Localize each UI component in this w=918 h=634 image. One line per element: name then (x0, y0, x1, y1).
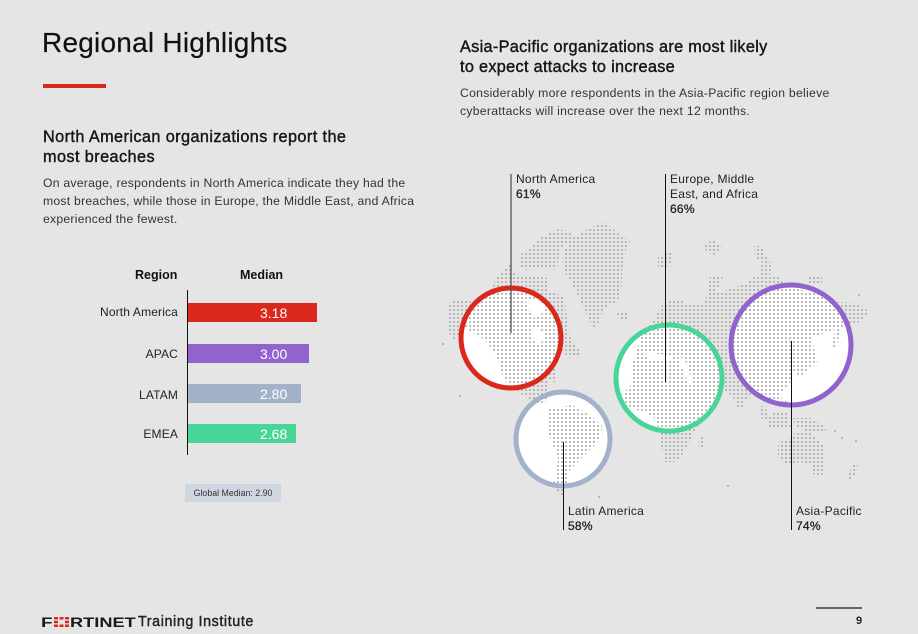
map water cut-outs (525, 298, 694, 386)
text block: North America (43, 176, 414, 226)
leader lines (511, 174, 792, 530)
label: EMEA 66%: East, and Africa (670, 187, 758, 201)
ring: EMEA (616, 325, 722, 431)
Greenland (562, 222, 631, 330)
text block: Asia-Pacific (460, 86, 830, 118)
bar: APAC 3.00: 3.00 (260, 346, 287, 362)
heading: North America (43, 128, 346, 166)
bar: LATAM 2.80 (188, 384, 301, 403)
heading: Asia-Pacific (460, 38, 768, 76)
dotted world map (447, 222, 870, 497)
heading: North America: North American organizations report the (43, 128, 346, 146)
label: Asia-Pacific 74%: 74% (796, 519, 821, 533)
logo letter F: F (41, 614, 53, 630)
Arctic islands (518, 229, 573, 270)
Borneo and Java (768, 411, 791, 428)
text block: North America: most breaches, while those in Europe, the Middle East, and Africa (43, 194, 414, 208)
heading: Asia-Pacific: Asia-Pacific organizations are most likely (460, 38, 768, 56)
bar: North America 3.18 (188, 303, 317, 322)
column header: median: Median (240, 268, 283, 282)
ring: Asia-Pacific (731, 285, 851, 405)
Novaya Zemlya (754, 246, 771, 277)
Iceland (617, 313, 627, 320)
row label: LATAM: LATAM (139, 388, 178, 402)
label: Latin America 58% (568, 504, 644, 533)
Caribbean (570, 342, 582, 358)
page number: 9 (856, 615, 862, 627)
North America (447, 264, 580, 405)
bar: EMEA 2.68 (188, 424, 296, 443)
label: EMEA 66% (670, 172, 758, 216)
label: North America 61% (516, 172, 596, 201)
label: EMEA 66%: 66% (670, 202, 695, 216)
footer logo (41, 614, 254, 630)
logo wordmark: RTINET (70, 614, 136, 630)
Madagascar (698, 435, 704, 449)
South America (547, 405, 603, 497)
region rings (461, 285, 851, 486)
New Guinea (793, 418, 826, 433)
text block: North America: experienced the fewest. (43, 212, 177, 226)
Russian north islands (708, 276, 723, 298)
ring: North America (461, 288, 561, 388)
row label: EMEA: EMEA (143, 427, 178, 441)
row label: APAC: APAC (146, 347, 178, 361)
column header: region: Region (135, 268, 177, 282)
chart axis (187, 290, 188, 455)
heading: Asia-Pacific: to expect attacks to increase (460, 58, 675, 76)
heading: North America: most breaches (43, 148, 155, 166)
Arctic north of Asia (807, 277, 822, 283)
bar chart: median breaches by region (100, 268, 317, 502)
text block: North America: On average, respondents in North America indicate they had the (43, 176, 405, 190)
label: Latin America 58%: 58% (568, 519, 593, 533)
bar: APAC 3.00 (188, 344, 309, 363)
Australia (778, 432, 825, 476)
text block: Asia-Pacific: Considerably more respondents in the Asia-Pacific region believe (460, 86, 830, 100)
northern island (658, 250, 674, 268)
bar: EMEA 2.68: 2.68 (260, 426, 287, 442)
Sumatra (759, 406, 769, 419)
Japan (831, 326, 841, 349)
label: Latin America 58%: Latin America (568, 504, 644, 518)
logo caption: Training Institute (138, 614, 254, 630)
title: Regional Highlights (42, 27, 288, 58)
scattered map dots (442, 294, 860, 498)
New Zealand (846, 465, 858, 480)
label: North America 61%: North America (516, 172, 595, 186)
text block: Asia-Pacific: cyberattacks will increase over the next 12 months. (460, 104, 750, 118)
bar: LATAM 2.80: 2.80 (260, 386, 287, 402)
Svalbard (702, 240, 722, 255)
white region circles (461, 285, 851, 486)
Eurasia and Africa (622, 275, 870, 462)
footer rule (816, 607, 862, 608)
label: North America 61%: 61% (516, 187, 541, 201)
label: Asia-Pacific 74% (796, 504, 862, 533)
logo red grid mark (54, 617, 69, 627)
label: EMEA 66%: Europe, Middle (670, 172, 754, 186)
row label: North America: North America (100, 305, 178, 319)
title accent rule (43, 84, 106, 88)
bar: North America 3.18: 3.18 (260, 305, 287, 321)
label: Asia-Pacific 74%: Asia-Pacific (796, 504, 862, 518)
global median tag (185, 484, 281, 502)
global median tag: Global Median: 2.90 (194, 488, 272, 498)
ring: Latin America (516, 392, 610, 486)
